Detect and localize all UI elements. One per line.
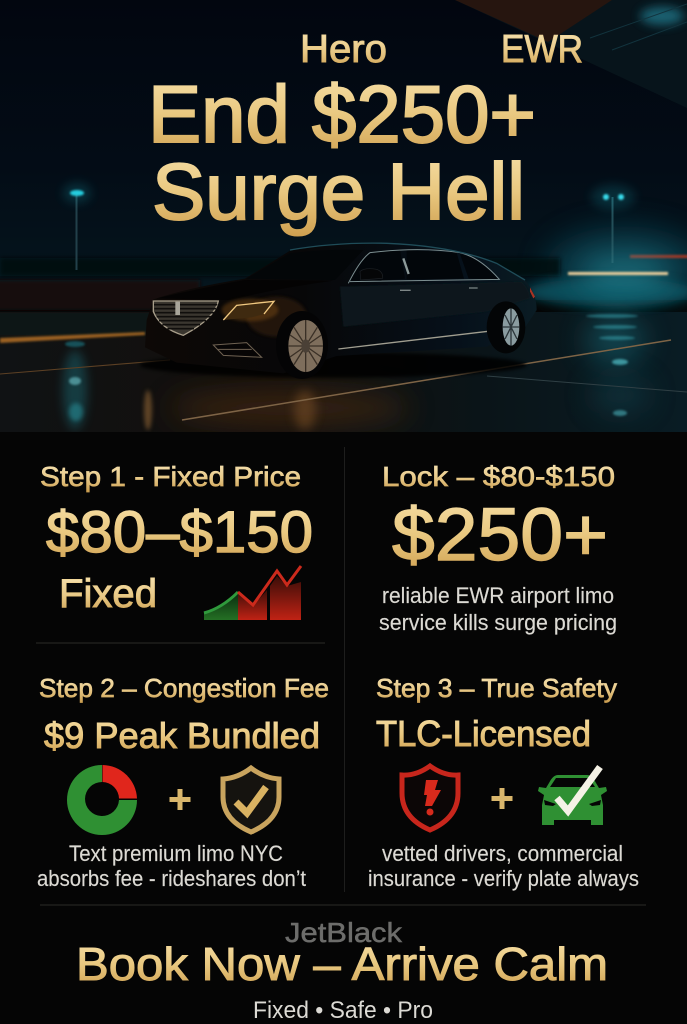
door handles [400,288,478,290]
window chrome line [348,250,499,283]
brand name: JetBlack [285,917,403,948]
icon: plus [170,789,190,810]
description: vetted drivers, commercial [382,841,623,866]
tagline: Fixed • Safe • Pro [253,997,433,1024]
side mirror [360,269,383,280]
chrome side trim [338,331,493,349]
heading: Step 2 – Congestion Fee [39,673,329,703]
body shoulder sheen [340,282,530,327]
icon: donut chart [67,765,137,835]
hood [160,281,328,299]
hero title line 2: Surge Hell [152,147,525,236]
rear wheel [487,301,525,353]
front fender warm sheen [247,297,307,337]
left lamp post [63,183,91,270]
window pillar reflection [403,258,409,274]
roadside barrier [0,280,200,310]
description: insurance - verify plate always [368,866,639,891]
horizontal divider lower [40,904,646,906]
chart: surge trend [204,566,301,620]
vertical panel divider [344,447,345,892]
icon: red warning shield [402,766,458,830]
ground [0,312,687,432]
side windows [382,250,498,280]
hero label EWR: EWR [501,28,583,71]
left orange curb line [0,332,145,343]
grille [153,301,218,335]
panel: step 1 fixed price [40,461,313,620]
description: Text premium limo NYC [69,841,283,866]
roof rim light [290,243,525,280]
icon: green car with check [538,767,607,825]
cta headline: Book Now – Arrive Calm [76,938,608,990]
tail light [530,287,535,298]
hero title line 1: End $250+ [148,70,536,160]
right road teal blur [525,278,687,306]
panel: hero [0,0,687,432]
icon: plus [492,788,512,809]
description [379,583,617,635]
panel: lock price [379,461,617,635]
license label: TLC-Licensed [376,713,591,754]
parking garage roof [455,0,687,108]
front wheel [276,311,323,379]
windshield [247,250,363,280]
price: $80–$150 [46,500,313,565]
distant tree line [0,258,560,276]
panel: step 2 congestion fee [37,673,329,891]
bundled fee: $9 Peak Bundled [44,715,320,756]
description [368,841,639,891]
surge price: $250+ [392,493,608,576]
description: reliable EWR airport limo [382,583,614,608]
footer call to action [76,917,608,1024]
heading: Step 3 – True Safety [376,673,617,703]
description: service kills surge pricing [379,610,617,635]
fixed label: Fixed [59,572,157,616]
light streaks [568,254,687,290]
teal haze on the right [545,226,687,310]
limo body [145,243,537,373]
icon: black limousine [140,243,537,379]
lower intake [213,343,262,357]
horizontal divider upper left [36,642,325,644]
hero night sky [0,0,687,300]
parking lines [0,340,687,420]
icon: gold check shield [223,768,279,832]
description [37,841,306,891]
heading: Step 1 - Fixed Price [40,461,301,492]
heading: Lock – $80-$150 [382,461,615,492]
panel: step 3 true safety [368,673,639,891]
description: absorbs fee - rideshares don’t [37,866,306,891]
right lamp post [591,185,635,263]
hero label Hero: Hero [300,28,387,71]
left wet road strip [0,312,149,313]
wet pavement reflections [63,314,650,430]
headlight [222,299,278,321]
